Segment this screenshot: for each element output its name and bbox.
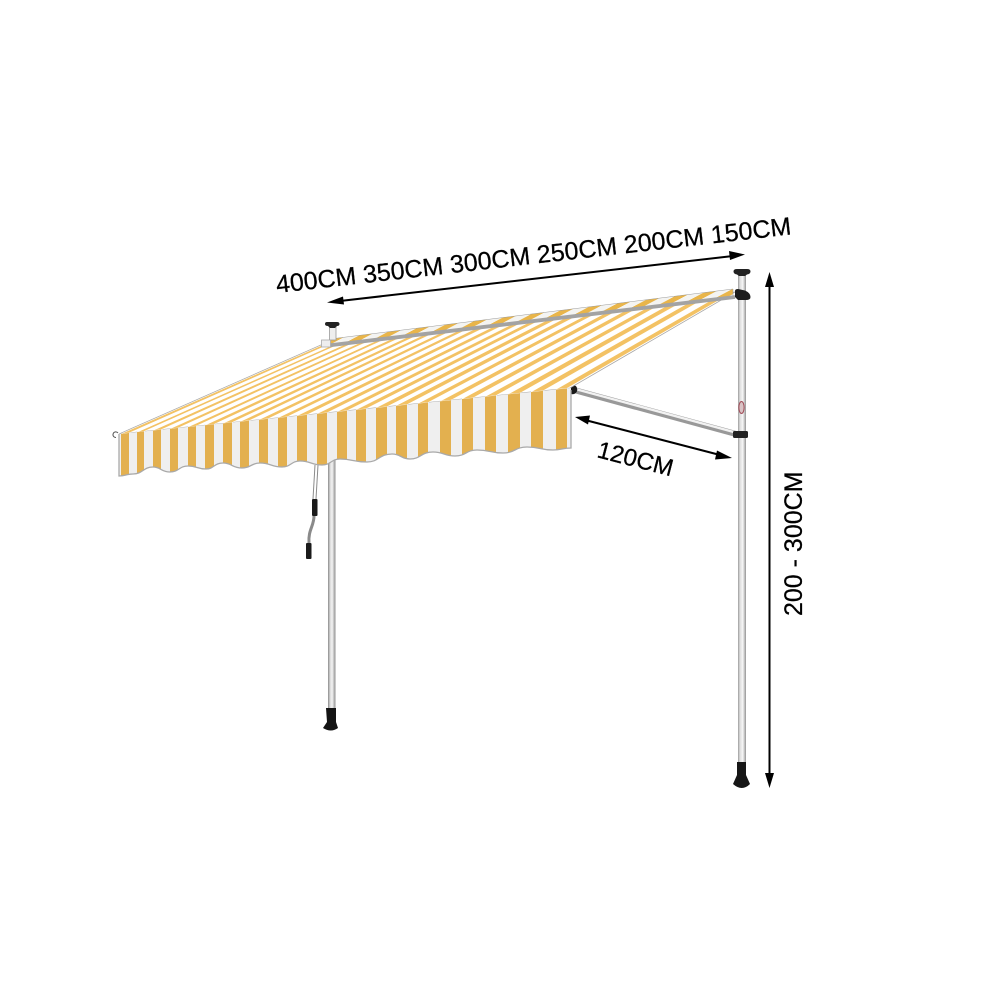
width label: 400CM 350CM 300CM 250CM 200CM 150CM [275,212,793,299]
crank handle [306,465,318,559]
valance edge [119,390,571,476]
roof stripes [121,292,732,434]
right pole logo sticker [739,402,744,414]
height dimension arrow [765,272,774,788]
projection label: 120CM [594,437,676,482]
roller strip [328,289,735,346]
right clamp [735,289,750,300]
infographic: awning with dimensions [112,217,802,788]
strut joint [568,385,577,394]
strut clamp [733,431,748,438]
support strut [568,385,748,438]
height label: 200 - 300CM [780,471,808,616]
roller bar [328,297,735,346]
right pole top cap [734,269,750,276]
left pole foot [323,708,338,730]
awning roof [119,292,735,434]
left pole [323,460,338,730]
right pole foot [733,762,750,788]
left bracket [322,322,340,347]
width dimension arrow [327,251,745,304]
left bracket cap [325,322,340,328]
left hook [113,432,118,438]
valance stripes [121,388,567,476]
valance [118,388,572,477]
projection dimension arrow [575,416,732,460]
right pole [733,269,750,788]
